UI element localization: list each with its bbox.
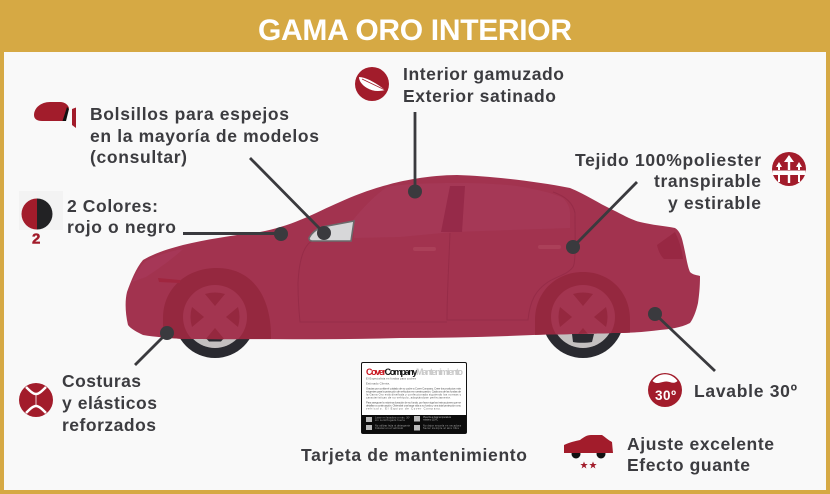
text: seams	[62, 371, 157, 435]
leader: mirror pockets	[250, 158, 331, 240]
card care text	[375, 416, 462, 430]
text: fit: Efecto guante	[627, 455, 750, 475]
card body text: vehículo. El Equipo de Cover Company.	[366, 406, 441, 410]
text: mirror pockets: Bolsillos para espejos	[90, 104, 289, 124]
text: mirror pockets: (consultar)	[90, 147, 187, 167]
card body text: Para asegurar la máxima duración de su funda, por favor siga las instrucciones que se	[366, 400, 462, 404]
text: maintenance card: Tarjeta de mantenimiento	[301, 445, 527, 465]
card logo: CoverCompanyMantenimiento	[366, 367, 464, 377]
leader: suede interior	[408, 112, 422, 198]
car illustration	[126, 175, 700, 358]
front quarter window	[309, 221, 354, 241]
text: suede: Interior gamuzado	[403, 64, 564, 84]
card care text: máximo 110ºC	[423, 418, 438, 422]
text: suede: Exterior satinado	[403, 86, 556, 106]
card care text: Lavar en lavadora a máx. 30º	[375, 416, 410, 420]
card care text: Colocar en el vehículo	[375, 427, 404, 430]
wheel arches and hubs	[163, 268, 630, 340]
leader: colours	[183, 227, 288, 241]
window pillar	[441, 186, 465, 232]
card care text: Plancha a baja temperatura	[423, 416, 452, 419]
leader: washable	[648, 307, 715, 371]
side windows	[353, 183, 570, 238]
icon: washable 30	[648, 373, 682, 407]
card care text: Secar siempre al aire libre	[423, 427, 460, 430]
leader: fabric	[566, 182, 637, 254]
car body	[126, 175, 700, 339]
front wheel tyre	[174, 276, 256, 358]
card care text: sin centrifugado fuerte	[375, 419, 406, 422]
text: seams: Costuras	[62, 371, 141, 391]
text: fit: Ajuste excelente	[627, 434, 774, 454]
card body text: detallan a continuación. Obtendrá una larga vida a su funda y una total protección a su	[366, 404, 462, 408]
text: fabric: transpirable	[654, 171, 761, 191]
door handles	[415, 247, 559, 249]
tail light	[657, 232, 683, 259]
leader: seams	[135, 326, 174, 365]
card body text: características de su vehículo, adaptándose perfectamente.	[366, 396, 451, 400]
front marker	[158, 278, 180, 283]
card body text: la Gama Oro está diseñada y confeccionada siguiendo las normas y	[366, 392, 462, 396]
text: fabric: Tejido 100%poliester	[575, 150, 761, 170]
rear wheel tyre	[542, 276, 624, 358]
icon: car fit	[564, 435, 613, 468]
text: seams: reforzados	[62, 415, 156, 435]
card care text: No dejar secarla en secadora	[423, 424, 462, 428]
icon: washable 30: 30º	[655, 388, 676, 403]
maintenance card	[362, 362, 466, 434]
text: suede	[403, 64, 564, 106]
text: fit	[627, 434, 774, 475]
text: colours: rojo o negro	[67, 217, 176, 237]
headlight	[132, 249, 183, 282]
card body text: Gracias por confiar el cuidado de su coche a Cover Company. Creer los productos más	[366, 386, 462, 390]
card body text	[366, 376, 462, 410]
text: washable: Lavable 30º	[694, 381, 798, 401]
icon: feather	[355, 67, 389, 101]
text: seams: y elásticos	[62, 393, 157, 413]
icon: two colours	[19, 191, 63, 248]
card body text: El Especialista en fundas para coches	[366, 376, 417, 380]
card body text: exigentes para la protección de vehículos es nuestra pasión. Cada una de las fundas de	[366, 390, 462, 394]
title: GAMA ORO INTERIOR	[258, 14, 572, 47]
text: fabric	[575, 150, 761, 213]
card care icons	[366, 416, 420, 430]
card care text: No utilizar lejía ni detergente	[375, 424, 411, 428]
text: mirror pockets: en la mayoría de modelos	[90, 126, 319, 146]
icon: two colours: 2	[32, 230, 40, 248]
card body text: Estimado Cliente,	[366, 382, 390, 386]
text: colours	[67, 196, 176, 237]
icon: breathable fabric	[772, 152, 806, 186]
text: fabric: y estirable	[668, 193, 761, 213]
icon: mirror	[34, 102, 76, 128]
text: mirror pockets	[90, 104, 319, 167]
icon: reinforced seams	[19, 383, 53, 417]
text: colours: 2 Colores:	[67, 196, 158, 216]
door seams	[298, 192, 575, 322]
